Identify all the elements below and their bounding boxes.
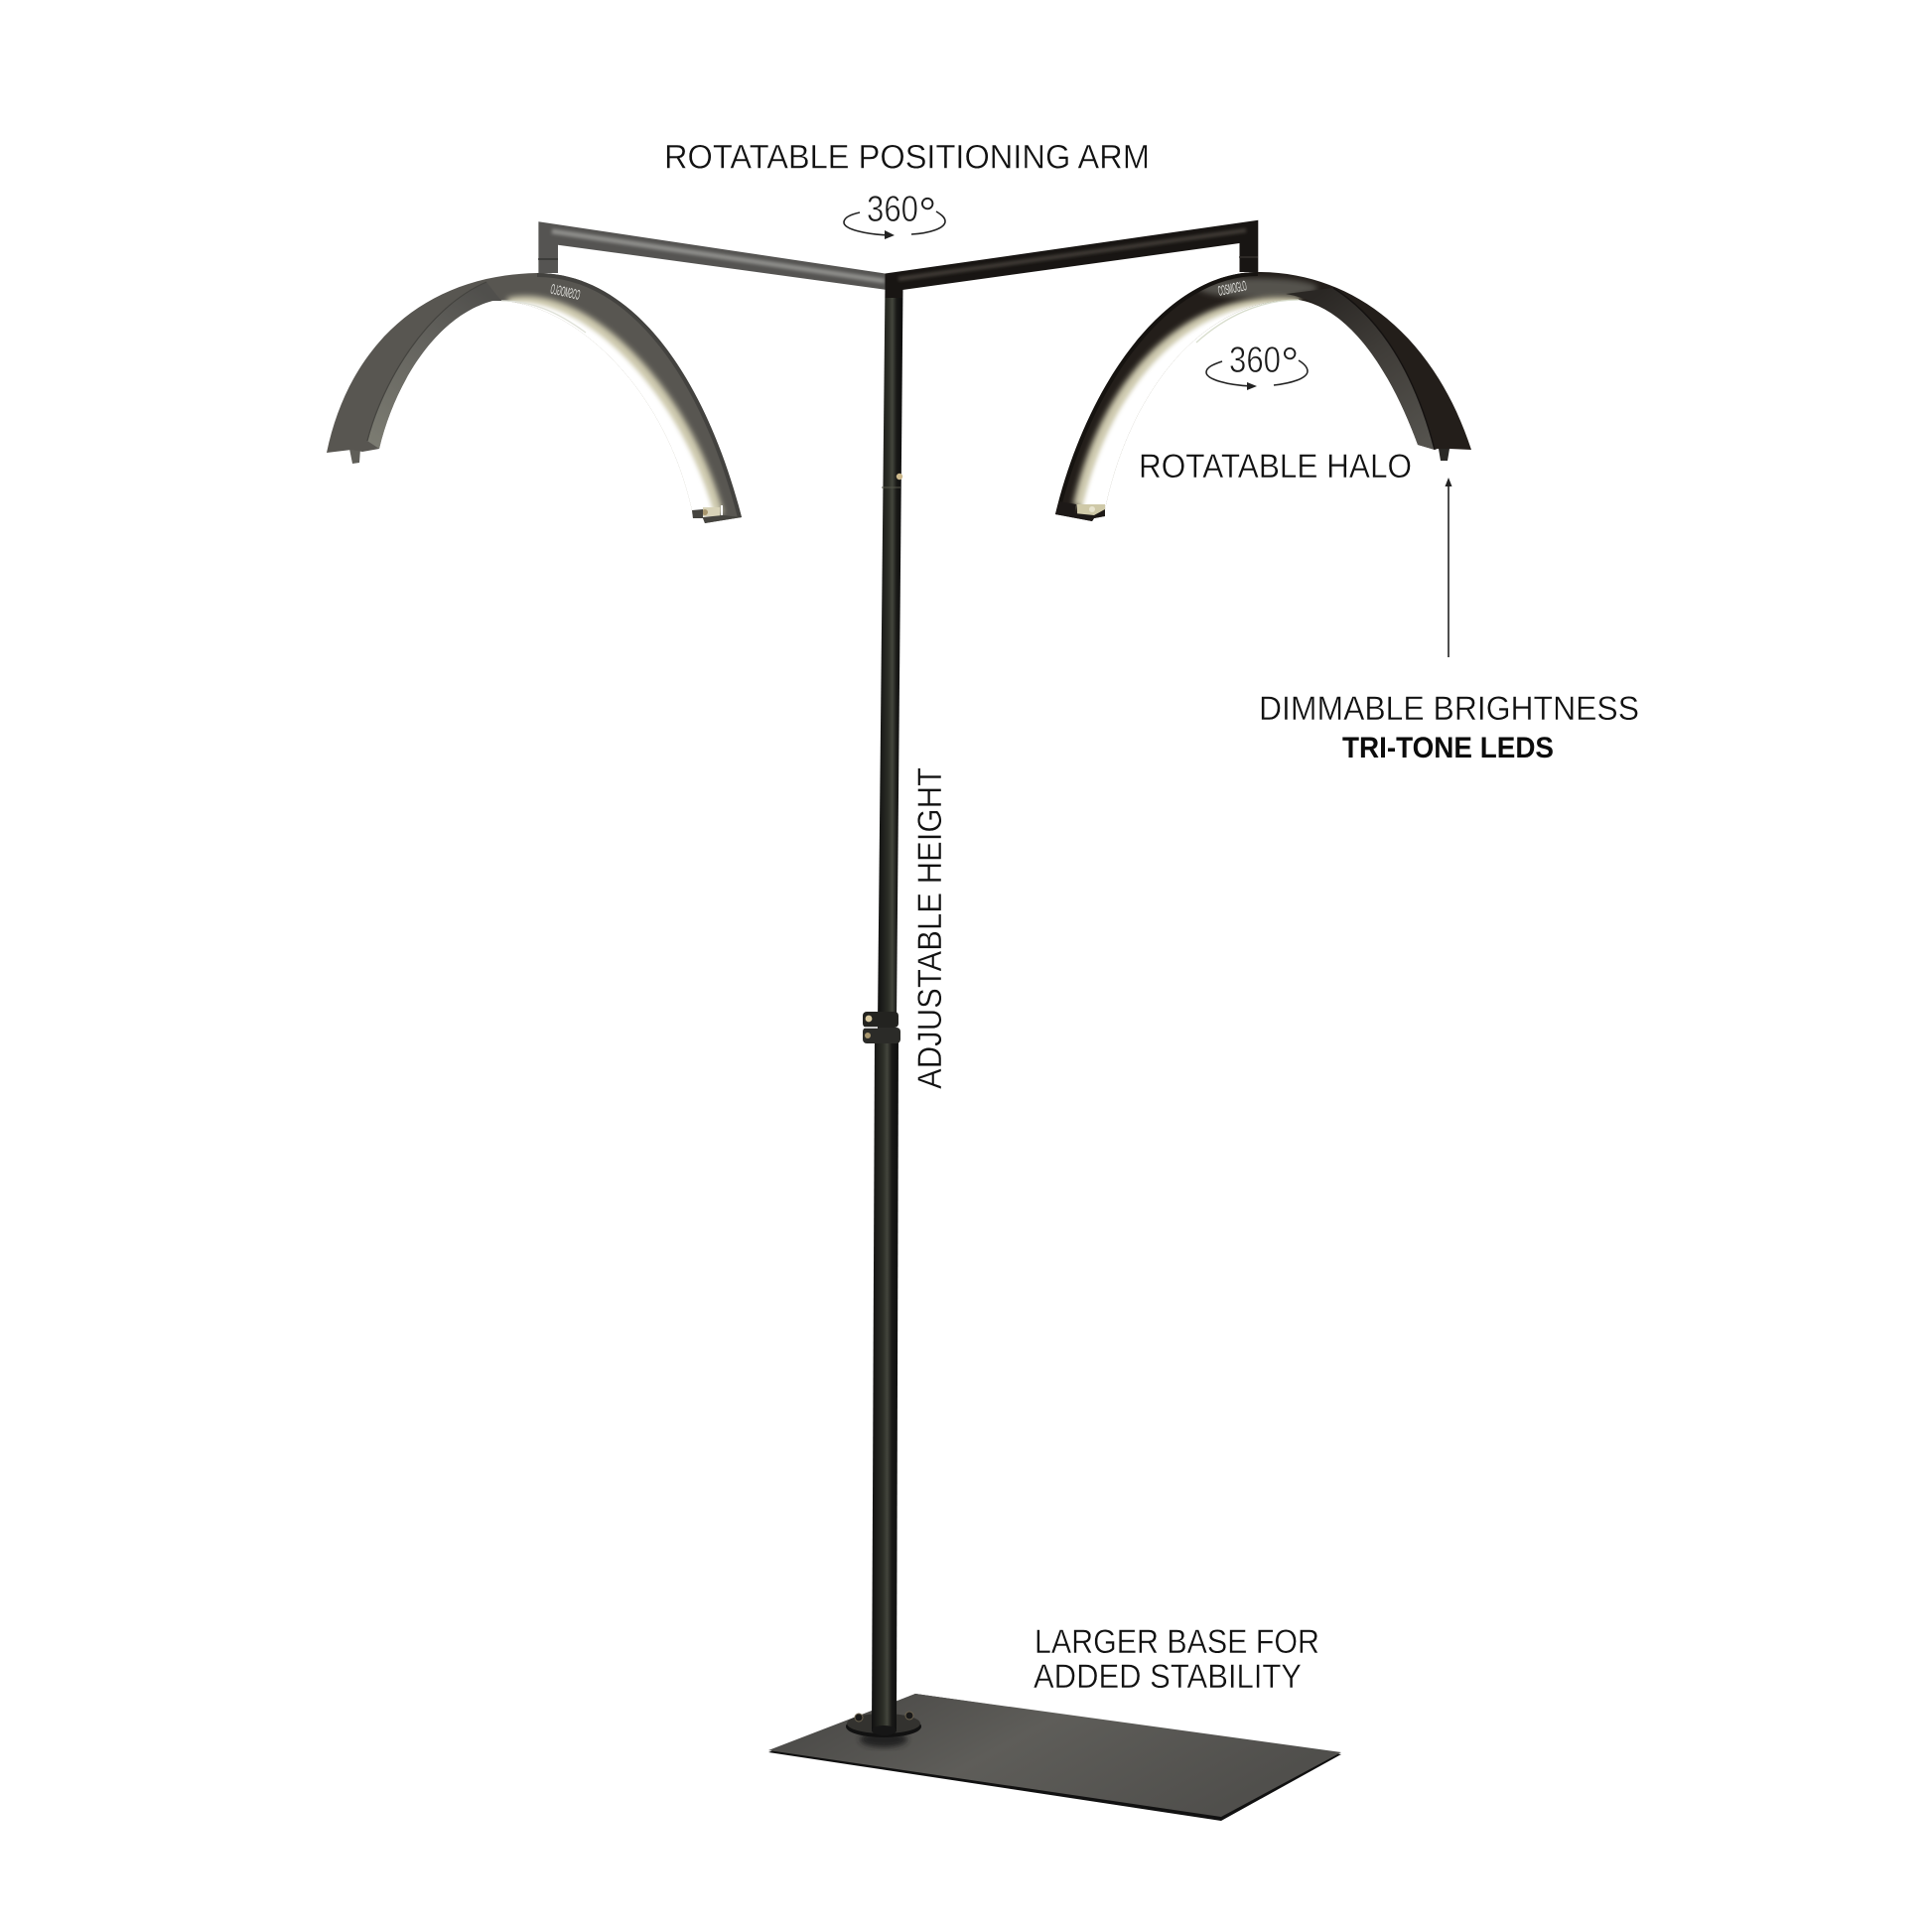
left mounting stud [349,449,360,464]
right halo light [1055,272,1471,521]
right positioning arm [886,220,1258,298]
left halo light: COSMOGLO [549,281,582,303]
icon: 360 degree rotation, halo: ° [1281,338,1299,389]
icon: 360 degree rotation, arm: ° [918,188,936,239]
height adjustment collar [863,1012,900,1043]
callout: dimmable brightness, tri-tone LEDs: TRI-TONE LEDS [1342,732,1554,764]
lamp infographic canvas [327,145,1638,1821]
callout: dimmable brightness, tri-tone LEDs: DIMMABLE BRIGHTNESS [1259,690,1639,728]
icon: 360 degree rotation, halo: 360 [1229,340,1281,380]
left positioning arm [538,221,886,290]
right halo light: COSMOGLO [1216,277,1248,299]
label: rotatable positioning arm: ROTATABLE POSITIONING ARM [664,139,1150,177]
right diffuser edge [1196,300,1299,343]
right halo housing and led strip [1055,272,1471,521]
right halo end cap [1055,501,1105,521]
right mounting stud [1439,449,1449,461]
left halo housing and led strip [327,273,742,523]
callout: larger base: ADDED STABILITY [1034,1658,1302,1696]
icon: 360 degree rotation, halo [1206,338,1308,390]
icon: 360 degree rotation, arm [844,188,945,239]
label: rotatable halo: ROTATABLE HALO [1139,448,1412,485]
brass screw [897,474,902,480]
label: adjustable height: ADJUSTABLE HEIGHT [911,767,949,1089]
callout: dimmable brightness, tri-tone LEDs [1259,690,1639,764]
left halo light [327,273,742,523]
icon: 360 degree rotation, arm: 360 [867,189,918,229]
callout: larger base: LARGER BASE FOR [1035,1623,1319,1661]
arrow: brightness callout to halo [1446,478,1451,657]
left diffuser edge [501,301,586,333]
left halo end cap [692,505,742,523]
vertical pole [863,283,903,1735]
base plate [768,1694,1341,1821]
callout: larger base [1034,1623,1319,1696]
